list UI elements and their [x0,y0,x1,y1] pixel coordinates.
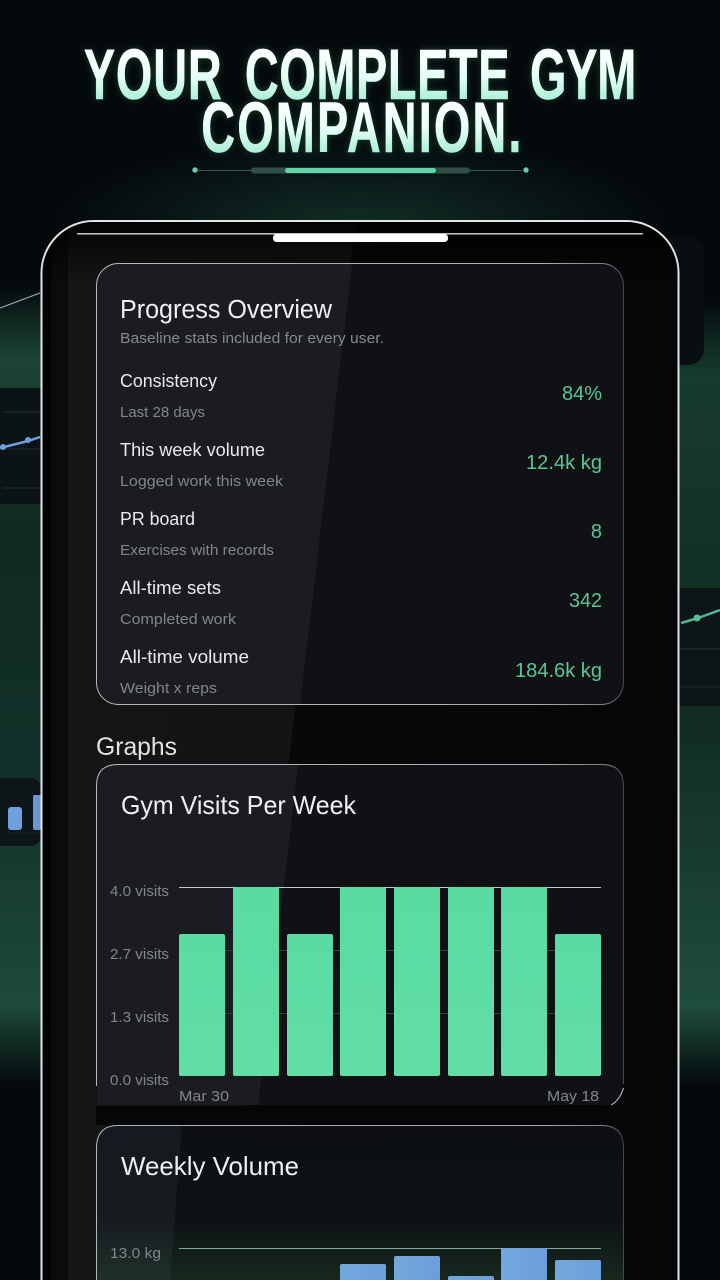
heading: weekly volume: Weekly Volume [121,1151,299,1181]
x axis labels: May 18 [547,1088,599,1105]
heading: progress overview: Progress Overview [120,296,333,324]
y axis labels: 4.0 visits [110,883,169,900]
heading: gym visits per week: Gym Visits Per Week [121,790,357,820]
stat: this week volume [120,440,602,490]
y axis labels: 2.7 visits [110,946,169,963]
y axis labels: 1.3 visits [110,1009,169,1026]
subtitle: Baseline stats included for every user. [120,331,384,347]
bar chart: visits [179,887,601,1076]
stat: consistency: 84% [562,383,602,405]
stat: consistency: Consistency [120,371,217,391]
title line 1: COMPLETE [245,35,510,114]
x axis labels [179,1088,599,1105]
x axis labels: Mar 30 [179,1088,229,1105]
y axis labels: 0.0 visits [110,1072,169,1089]
bar chart: volume [179,1248,601,1280]
stat: all-time sets: Completed work [120,611,237,628]
phone frame [42,221,678,1280]
stat: all-time sets [120,578,602,628]
stat: consistency [120,371,602,421]
stat: pr board: Exercises with records [120,542,274,559]
y axis label: 13.0 kg [110,1245,161,1262]
stat: all-time volume: All-time volume [120,647,249,667]
title line 1: GYM [530,35,636,114]
stat: all-time volume: 184.6k kg [515,660,602,682]
stat: this week volume: Logged work this week [120,473,284,490]
panel: gym visits per week [96,764,624,1105]
stat: this week volume: This week volume [120,440,265,460]
heading: graphs: Graphs [96,733,177,761]
title line 1 [84,35,636,114]
stat: pr board: PR board [120,509,195,529]
panel: progress overview [96,264,624,705]
stat: all-time volume: Weight x reps [120,680,217,697]
stat: this week volume: 12.4k kg [526,452,602,474]
stat: all-time volume [120,647,602,697]
side card: left bar chart [0,778,42,846]
stat: pr board: 8 [591,521,602,543]
title underline ornament [192,167,529,174]
side card: left line chart [0,293,42,504]
title line 2: COMPANION. [201,88,521,167]
panel: weekly volume [96,1106,624,1280]
phone notch bar [273,234,448,242]
stat: all-time sets: 342 [569,590,602,612]
stat: consistency: Last 28 days [120,404,205,421]
stat: all-time sets: All-time sets [120,578,221,598]
side card: right top [640,237,704,365]
title line 1: YOUR [84,35,222,114]
title [84,35,636,167]
side card: right line chart [678,588,720,706]
stat: pr board [120,509,602,559]
y axis labels [110,883,169,1089]
